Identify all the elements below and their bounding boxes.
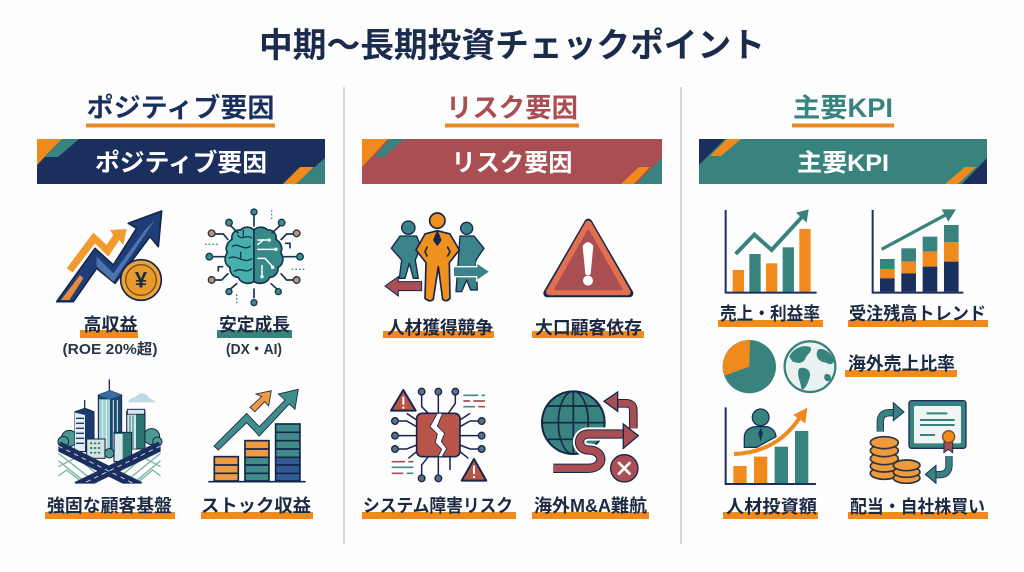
label: high profitability: 高収益 xyxy=(84,315,138,335)
heading: key KPIs: 主要KPI xyxy=(793,93,893,123)
icon: rising arrow with yen coin: ¥ xyxy=(135,268,148,293)
heading: positive factors: ポジティブ要因 xyxy=(86,93,274,123)
label: talent investment: 人材投資額 xyxy=(726,497,817,517)
banner: key KPIs: 主要KPI xyxy=(797,149,889,177)
panel: risk factors xyxy=(362,93,662,519)
icon: city buildings xyxy=(58,379,162,487)
title: 中期〜長期投資チェックポイント xyxy=(259,27,765,65)
label: strong customer base: 強固な顧客基盤 xyxy=(47,496,172,516)
label: talent competition: 人材獲得競争 xyxy=(387,318,493,338)
label: dividends and buybacks: 配当・自社株買い xyxy=(850,497,985,517)
sublabel: DX AI: (DX・AI) xyxy=(226,341,282,358)
icon: globe and overseas M&A path xyxy=(542,391,638,482)
label: sales and profit margin: 売上・利益率 xyxy=(720,304,820,324)
icon: world globe xyxy=(785,341,835,392)
label: system failure risk: システム障害リスク xyxy=(363,496,513,516)
banner: risk factors: リスク要因 xyxy=(452,149,572,177)
sublabel: ROE: (ROE 20%超) xyxy=(62,340,158,358)
banner: positive factors: ポジティブ要因 xyxy=(95,148,267,177)
icon: talent investment chart xyxy=(726,407,816,484)
label: stock revenue: ストック収益 xyxy=(201,496,311,516)
banner: key KPIs xyxy=(699,139,987,184)
label: large customer dependency: 大口顧客依存 xyxy=(535,318,642,338)
label: stable growth: 安定成長 xyxy=(219,314,290,335)
icon: talent competition xyxy=(385,213,490,301)
icon: order backlog stacked chart xyxy=(873,209,963,293)
banner: risk factors xyxy=(362,139,662,184)
label: overseas M&A difficulty: 海外M&A難航 xyxy=(534,496,647,516)
icon: stock revenue chart xyxy=(208,389,306,482)
icon: system failure chip xyxy=(391,388,486,482)
icon: sales and margin chart xyxy=(726,209,817,293)
icon: pie chart xyxy=(723,340,776,393)
heading: risk factors: リスク要因 xyxy=(446,93,578,123)
panel: key KPIs xyxy=(699,93,988,519)
icon: rising arrow with yen coin xyxy=(57,211,162,302)
label: overseas sales ratio: 海外売上比率 xyxy=(848,354,955,374)
icon: AI brain circuit xyxy=(205,209,305,306)
panel: positive factors xyxy=(37,93,325,519)
icon: warning triangle xyxy=(547,223,629,293)
label: order backlog trend: 受注残高トレンド xyxy=(849,303,986,324)
icon: dividends and buyback xyxy=(870,401,966,483)
banner: positive factors xyxy=(37,139,325,184)
